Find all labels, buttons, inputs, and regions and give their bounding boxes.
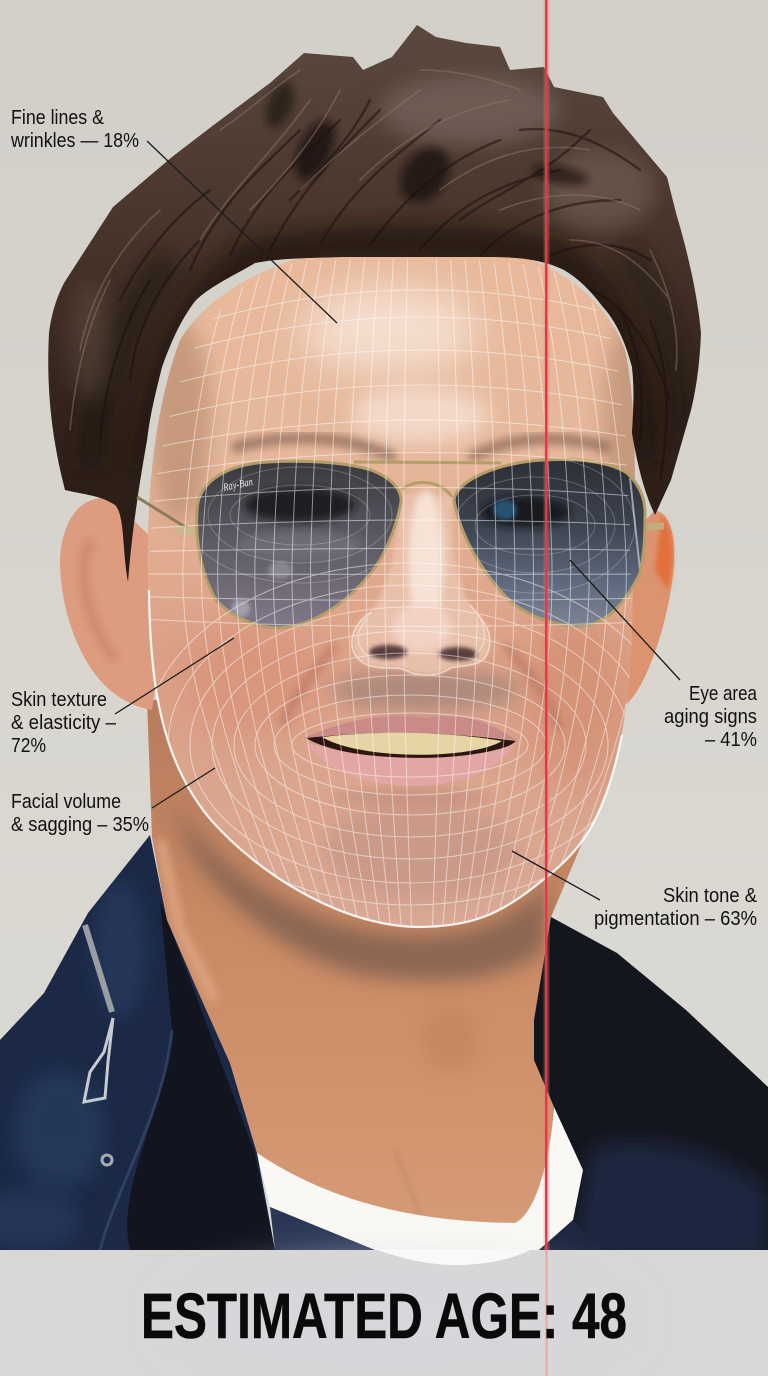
callout: skin texture: & elasticity – — [11, 712, 117, 734]
teeth — [322, 733, 502, 755]
callout: facial volume: & sagging – 35% — [11, 814, 149, 836]
face skin — [148, 240, 635, 927]
sweater — [270, 1207, 375, 1250]
banner collar overlap — [375, 1249, 532, 1265]
hair strands — [100, 100, 670, 480]
banner title: ESTIMATED AGE: 48 — [141, 1280, 627, 1352]
right hinge — [645, 526, 664, 527]
callout: fine lines: wrinkles — 18% — [10, 130, 139, 152]
right eye behind lens — [480, 478, 640, 570]
nostrils — [369, 645, 407, 659]
callout: eye area: – 41% — [705, 729, 757, 751]
callout: skin texture — [11, 638, 234, 757]
right ear — [610, 510, 674, 706]
nose mesh — [352, 605, 490, 675]
left hinge — [176, 530, 196, 532]
nose — [352, 490, 490, 675]
red scan line — [544, 0, 550, 1250]
left eye behind lens — [232, 488, 362, 617]
frames — [197, 460, 645, 628]
callout: eye area: Eye area — [689, 683, 758, 705]
jacket — [0, 835, 768, 1260]
under-chin shadow — [170, 800, 550, 981]
icon: jacket zipper — [84, 925, 113, 1165]
sunglasses — [137, 447, 664, 628]
left lens — [197, 461, 401, 628]
hair dark clumps — [291, 116, 339, 184]
sweater right — [539, 1220, 600, 1250]
callout: eye area — [570, 560, 758, 751]
hair dark hairline — [150, 243, 640, 470]
hair — [48, 25, 701, 582]
callout: fine lines: Fine lines & — [11, 107, 105, 129]
left temple arm — [137, 497, 190, 530]
lens mesh — [200, 461, 636, 594]
right lens — [454, 460, 645, 627]
callout: fine lines — [10, 107, 337, 323]
face shading — [150, 285, 656, 900]
callout: eye area: aging signs — [664, 706, 757, 728]
white shirt collar base — [257, 1107, 583, 1250]
callout: skin tone — [512, 851, 758, 930]
face mesh — [149, 258, 632, 926]
callout: skin texture: 72% — [11, 735, 46, 757]
upper lip — [304, 716, 516, 740]
callout: facial volume: Facial volume — [11, 791, 121, 813]
jacket inner lapel — [127, 900, 275, 1250]
jacket right shoulder — [530, 917, 768, 1250]
mouth opening — [306, 733, 516, 759]
jacket left side — [0, 835, 275, 1250]
lens brand mark: Ray-Ban — [221, 476, 254, 494]
lower lip — [306, 742, 516, 786]
neck — [147, 700, 625, 1223]
callout: skin tone: Skin tone & — [663, 885, 758, 907]
callout: skin texture: Skin texture — [11, 689, 107, 711]
banner tint — [170, 1260, 630, 1376]
hair light tufts — [380, 75, 560, 145]
left ear — [60, 498, 175, 710]
callout: skin tone: pigmentation – 63% — [594, 908, 757, 930]
mouth — [304, 716, 516, 786]
bottom banner — [0, 1249, 768, 1376]
banner red line — [546, 1250, 548, 1376]
callout: facial volume — [11, 768, 215, 836]
mouth concentric mesh — [292, 713, 528, 777]
jaw contour — [149, 590, 622, 927]
